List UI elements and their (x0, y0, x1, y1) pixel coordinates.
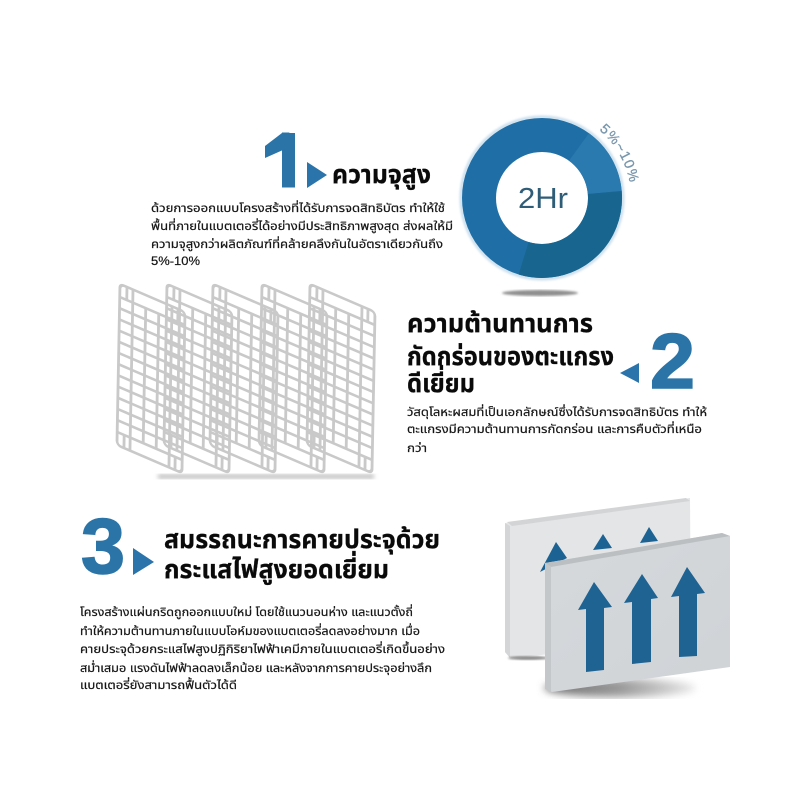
grid plate 2 (164, 284, 232, 473)
heading: corrosion resistance: ความต้านทานการ (407, 308, 593, 338)
grid plate 1 (117, 284, 185, 473)
text block: section 1 body: ด้วยการออกแบบโครงสร้างที่ได้รับการจดสิทธิบัตร ทำให้ใช้ (151, 200, 445, 215)
donut label: 5%~10%: 5%~10% (600, 123, 639, 182)
arrow 2 (624, 574, 658, 664)
text block: section 2 body (407, 404, 707, 455)
text block: section 3 body (80, 604, 445, 692)
donut shadow (502, 290, 578, 296)
panel: section 3 high-rate discharge (80, 502, 445, 692)
text block: section 3 body: โครงสร้างแผ่นกริดถูกออกแบบใหม่ โดยใช้แนวนอนห่าง และแนวตั้งถี่ (80, 604, 413, 619)
grid plate 5 (307, 284, 375, 473)
arrow 1 (578, 582, 612, 672)
grid plate 4 (259, 284, 327, 473)
arrow 3 (671, 567, 705, 657)
donut label: 2Hr: 2Hr (518, 183, 568, 215)
back plate arrows (540, 527, 658, 572)
heading: corrosion resistance: ดีเยี่ยม (407, 365, 475, 398)
front plate (545, 533, 730, 692)
icon: arrow pointing right 1 (307, 162, 327, 188)
donut segment: dark (524, 192, 605, 261)
panel: section 2 corrosion resistance (407, 308, 707, 455)
text block: section 1 body (151, 200, 453, 268)
grid plate 3 (210, 284, 278, 473)
illustration: grid plates (117, 284, 375, 479)
heading: high-rate discharge (164, 524, 440, 585)
panel: section 1 high capacity (151, 132, 452, 266)
chart: 2Hr donut (458, 114, 639, 282)
text block: section 2 body: ตะแกรงมีความต้านทานการกัดกร่อน และการคืบตัวที่เหนือ (407, 421, 702, 436)
text block: section 2 body: วัสดุโลหะผสมที่เป็นเอกลักษณ์ซึ่งได้รับการจดสิทธิบัตร ทำให้ (407, 404, 707, 419)
text block: section 2 body: กว่า (407, 441, 427, 455)
text block: section 1 body: 5%-10% (151, 256, 200, 268)
text block: section 3 body: ทำให้ความต้านทานภายในแบบโอห์มของแบตเตอรี่ลดลงอย่างมาก เมื่อ (80, 623, 420, 638)
donut segment: 5%-10% (579, 147, 605, 192)
icon: arrow pointing right 3 (133, 548, 154, 575)
heading: corrosion resistance (407, 308, 614, 398)
number 2: 2 (650, 317, 695, 405)
heading: corrosion resistance: กัดกร่อนของตะแกรง (407, 341, 614, 371)
heading: high capacity: ความจุสูง (332, 159, 431, 190)
text block: section 1 body: พื้นที่ภายในแบตเตอรี่ได้อย่างมีประสิทธิภาพสูงสุด ส่งผลให้มี (151, 218, 453, 233)
heading: high-rate discharge: สมรรถนะการคายประจุด้วย (164, 524, 440, 555)
text block: section 3 body: แบตเตอรี่ยังสามารถฟื้นตัวได้ดี (80, 677, 237, 692)
text block: section 1 body: ความจุสูงกว่าผลิตภัณฑ์ที่คล้ายคลึงกันในอัตราเดียวกันถึง (151, 236, 443, 251)
number 1 (265, 132, 295, 188)
plate shadow (544, 679, 696, 697)
heading: high-rate discharge: กระแสไฟสูงยอดเยี่ยม (164, 551, 389, 585)
text block: section 3 body: สม่ำเสมอ แรงดันไฟฟ้าลดลงเล็กน้อย และหลังจากการคายประจุอย่างลึก (80, 660, 432, 675)
icon: arrow pointing left 2 (620, 363, 639, 383)
number 3: 3 (81, 502, 125, 590)
front plate arrows (578, 567, 705, 672)
text block: section 3 body: คายประจุด้วยกระแสไฟสูงปฏิกิริยาไฟฟ้าเคมีภายในแบตเตอรี่เกิดขึ้นอย่าง (80, 641, 445, 656)
number 1: 1 (262, 116, 302, 204)
back plate (505, 498, 691, 660)
illustration: plates with arrows (505, 498, 730, 697)
grid shadow (158, 474, 374, 479)
